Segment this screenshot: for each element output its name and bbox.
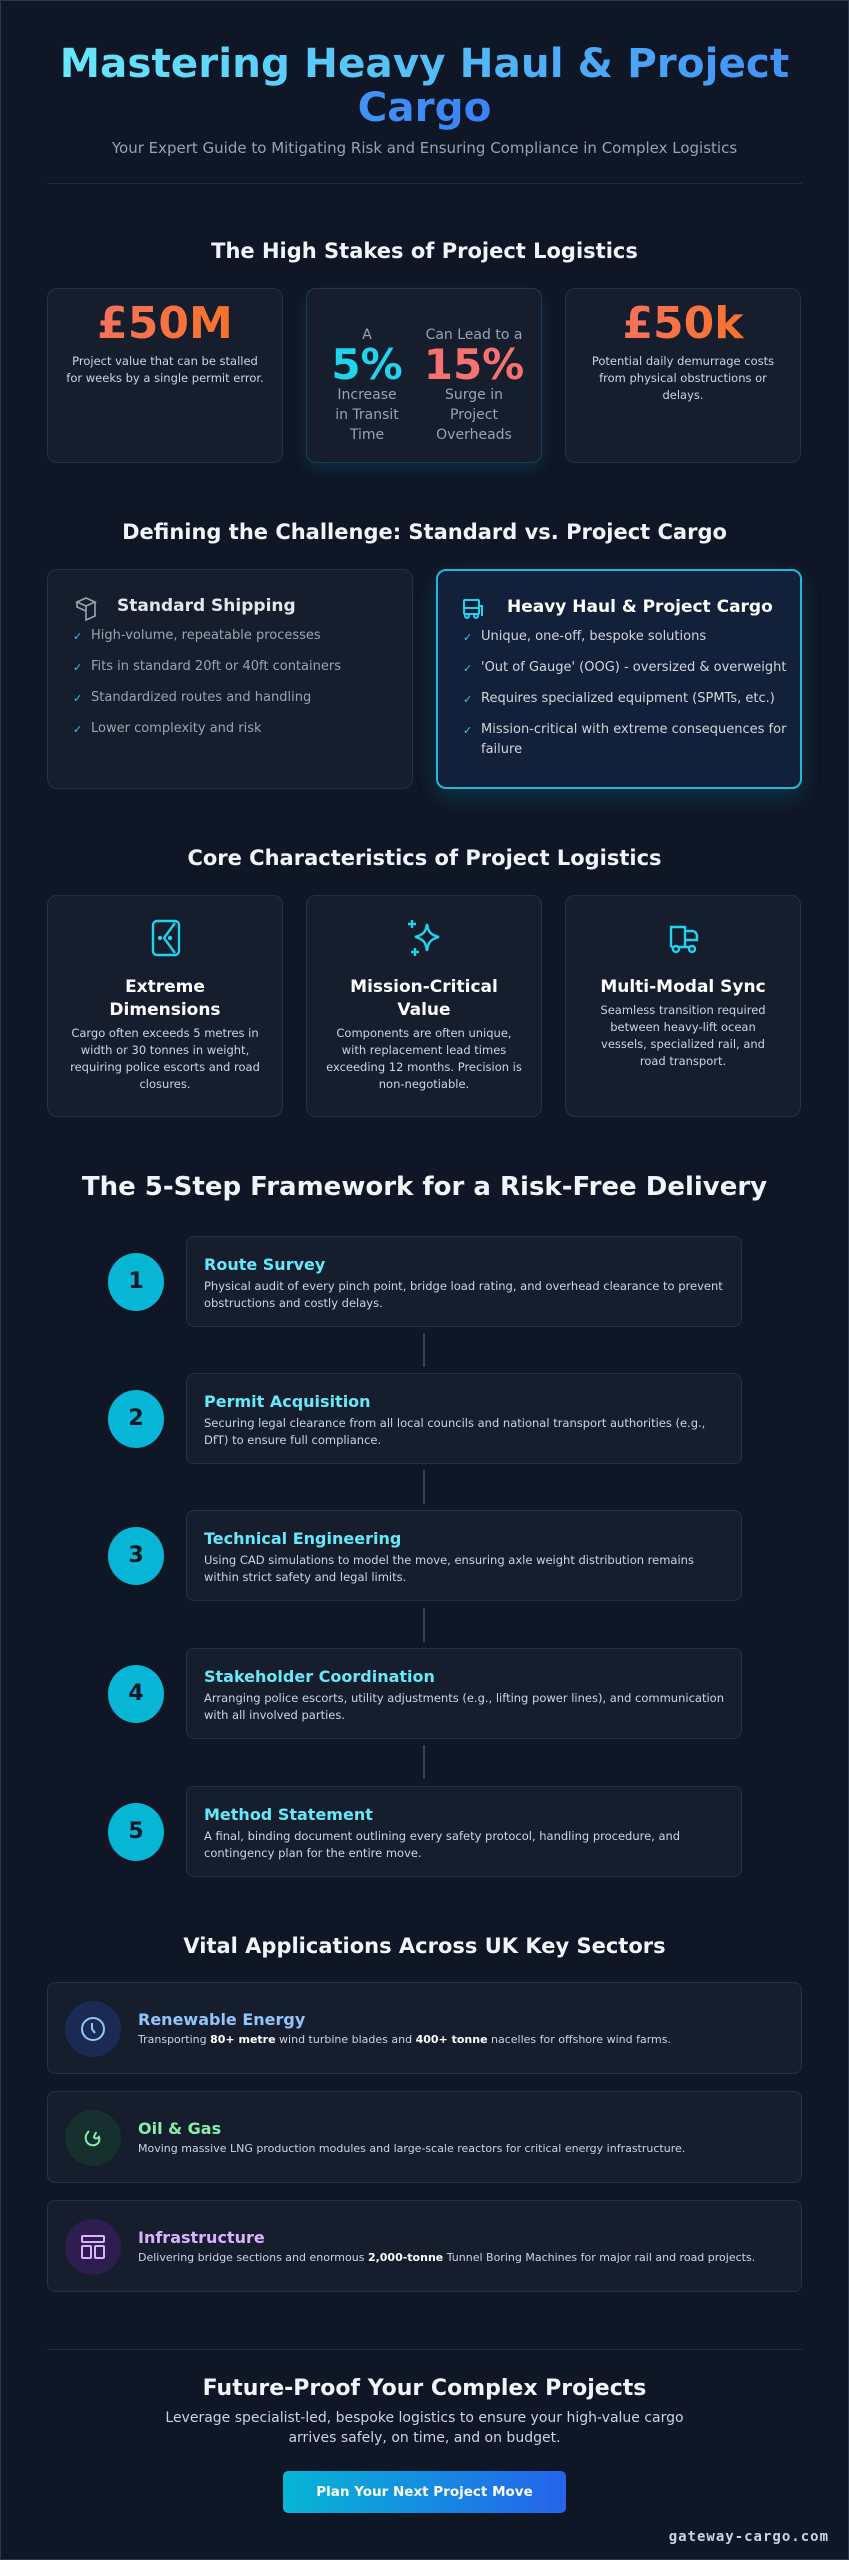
icon: flame [65, 2110, 121, 2166]
stat card: 5% / 15%: Can Lead to a [426, 327, 522, 343]
panel: heavy haul: Heavy Haul & Project Cargo [507, 597, 773, 617]
card: mission-critical: Value [397, 1000, 451, 1020]
step 2 [108, 1373, 742, 1464]
step 2: Permit Acquisition [204, 1392, 371, 1411]
step 2: 2 [128, 1406, 144, 1431]
card: extreme dimensions [47, 895, 283, 1117]
step 4 [108, 1648, 742, 1739]
panel: standard shipping: Standardized routes and handling [91, 690, 311, 705]
stat card: £50k: Potential daily demurrage costs from physical obstructions or delays. [592, 354, 774, 402]
icon: clock [65, 2001, 121, 2057]
icon: expand [152, 920, 180, 956]
sector: infrastructure: Infrastructure [138, 2228, 265, 2247]
stat card: £50M: Project value that can be stalled for weeks by a single permit error. [66, 354, 264, 385]
panel: standard shipping: Lower complexity and risk [91, 721, 262, 736]
card: multi-modal: Multi-Modal Sync [600, 977, 766, 997]
heading: vital applications: Vital Applications Across UK Key Sectors [183, 1934, 666, 1958]
CTA heading: Future-Proof Your Complex Projects [203, 2376, 646, 2401]
card: extreme dimensions: Dimensions [109, 1000, 221, 1020]
stat card: 5% / 15%: A [362, 327, 372, 343]
step 3 [108, 1510, 742, 1601]
heading: defining challenge: Defining the Challenge: Standard vs. Project Cargo [122, 520, 727, 544]
panel: heavy haul [436, 569, 802, 789]
stat card: £50k [565, 288, 801, 463]
title: Cargo [358, 83, 491, 131]
icon: layout [65, 2219, 121, 2275]
sector: oil & gas: Moving massive LNG production modules and large-scale reactors for critical energy infrastructure. [138, 2142, 685, 2155]
step 1: Route Survey [204, 1255, 325, 1274]
stat card: 5% / 15%: Overheads [436, 427, 512, 443]
step 4: Stakeholder Coordination [204, 1667, 435, 1686]
sector: oil & gas [47, 2091, 802, 2183]
CTA button [283, 2471, 566, 2513]
stat card: 5% / 15%: Increase [337, 387, 397, 403]
panel: heavy haul: Unique, one-off, bespoke solutions [481, 629, 706, 644]
heading: 5-step framework: The 5-Step Framework for a Risk-Free Delivery [82, 1172, 767, 1202]
step 4: Arranging police escorts, utility adjustments (e.g., lifting power lines), and communication with all involved parties. [204, 1691, 724, 1722]
step 4: 4 [128, 1681, 144, 1706]
step 1: Physical audit of every pinch point, bridge load rating, and overhead clearance to prevent obstructions and costly delays. [204, 1279, 723, 1310]
card: mission-critical: Mission-Critical [350, 977, 498, 997]
icon: sparkle [408, 920, 440, 956]
step 1 [108, 1236, 742, 1327]
step 5: Method Statement [204, 1805, 373, 1824]
heading: high stakes: The High Stakes of Project Logistics [211, 239, 638, 263]
stat card: 5% / 15%: Project [450, 407, 498, 423]
icon: truck [463, 599, 483, 619]
stat card: 5% / 15% [306, 288, 542, 463]
title [60, 39, 789, 131]
sector: renewable energy: Transporting 80+ metre wind turbine blades and 400+ tonne nacelles for offshore wind farms. [138, 2033, 671, 2046]
stat card: 5% / 15%: 5% [331, 340, 403, 389]
step 5: A final, binding document outlining every safety protocol, handling procedure, and contingency plan for the entire move. [204, 1829, 680, 1860]
heading: core characteristics: Core Characteristics of Project Logistics [187, 846, 662, 870]
card: extreme dimensions: Cargo often exceeds 5 metres in width or 30 tonnes in weight, requiring police escorts and road closures. [70, 1026, 260, 1091]
panel: standard shipping: High-volume, repeatable processes [91, 628, 321, 643]
step 5 [108, 1786, 742, 1877]
stat card: 5% / 15%: Time [350, 427, 384, 443]
icon: box [75, 597, 97, 622]
step 3: 3 [128, 1543, 144, 1568]
card: mission-critical: Components are often unique, with replacement lead times exceeding 12 months. Precision is non-negotiable. [326, 1026, 522, 1091]
stat card: £50k: £50k [622, 298, 744, 349]
sector: infrastructure [47, 2200, 802, 2292]
panel: standard shipping [47, 569, 413, 789]
stat card: £50M: £50M [97, 298, 233, 349]
panel: heavy haul: Requires specialized equipment (SPMTs, etc.) [481, 691, 775, 706]
stat card: 5% / 15%: Surge in [445, 387, 503, 403]
stat card: £50M [47, 288, 283, 463]
panel: heavy haul: 'Out of Gauge' (OOG) - oversized & overweight [481, 660, 786, 675]
panel: standard shipping: Fits in standard 20ft or 40ft containers [91, 659, 341, 674]
card: multi-modal [565, 895, 801, 1117]
step 3: Using CAD simulations to model the move, ensuring axle weight distribution remains within strict safety and legal limits. [204, 1553, 694, 1584]
sector: renewable energy: Renewable Energy [138, 2010, 305, 2029]
sector: infrastructure: Delivering bridge sections and enormous 2,000-tonne Tunnel Boring Machines for major rail and road projects. [138, 2251, 755, 2264]
panel: heavy haul: Mission-critical with extreme consequences for failure [481, 722, 786, 757]
card: multi-modal: Seamless transition required between heavy-lift ocean vessels, specialized rail, and road transport. [600, 1003, 766, 1068]
card: mission-critical [306, 895, 542, 1117]
icon: truck [670, 926, 698, 954]
step 5: 5 [128, 1819, 144, 1844]
step 2: Securing legal clearance from all local councils and national transport authorities (e.g., DfT) to ensure full compliance. [204, 1416, 705, 1447]
CTA text: Leverage specialist-led, bespoke logistics to ensure your high-value cargo arrives safely, on time, and on budget. [165, 2410, 684, 2446]
sector: renewable energy [47, 1982, 802, 2074]
step 1: 1 [128, 1269, 144, 1294]
step 3: Technical Engineering [204, 1529, 401, 1548]
sector: oil & gas: Oil & Gas [138, 2119, 221, 2138]
title: Mastering Heavy Haul & Project [60, 39, 789, 87]
subtitle: Your Expert Guide to Mitigating Risk and Ensuring Compliance in Complex Logistics [112, 139, 737, 157]
stat card: 5% / 15%: in Transit [335, 407, 399, 423]
CTA button: Plan Your Next Project Move [316, 2484, 533, 2500]
panel: standard shipping: Standard Shipping [117, 596, 296, 616]
stat card: 5% / 15%: 15% [424, 340, 524, 389]
footer brand: gateway-cargo.com [669, 2529, 829, 2545]
card: extreme dimensions: Extreme [125, 977, 205, 997]
